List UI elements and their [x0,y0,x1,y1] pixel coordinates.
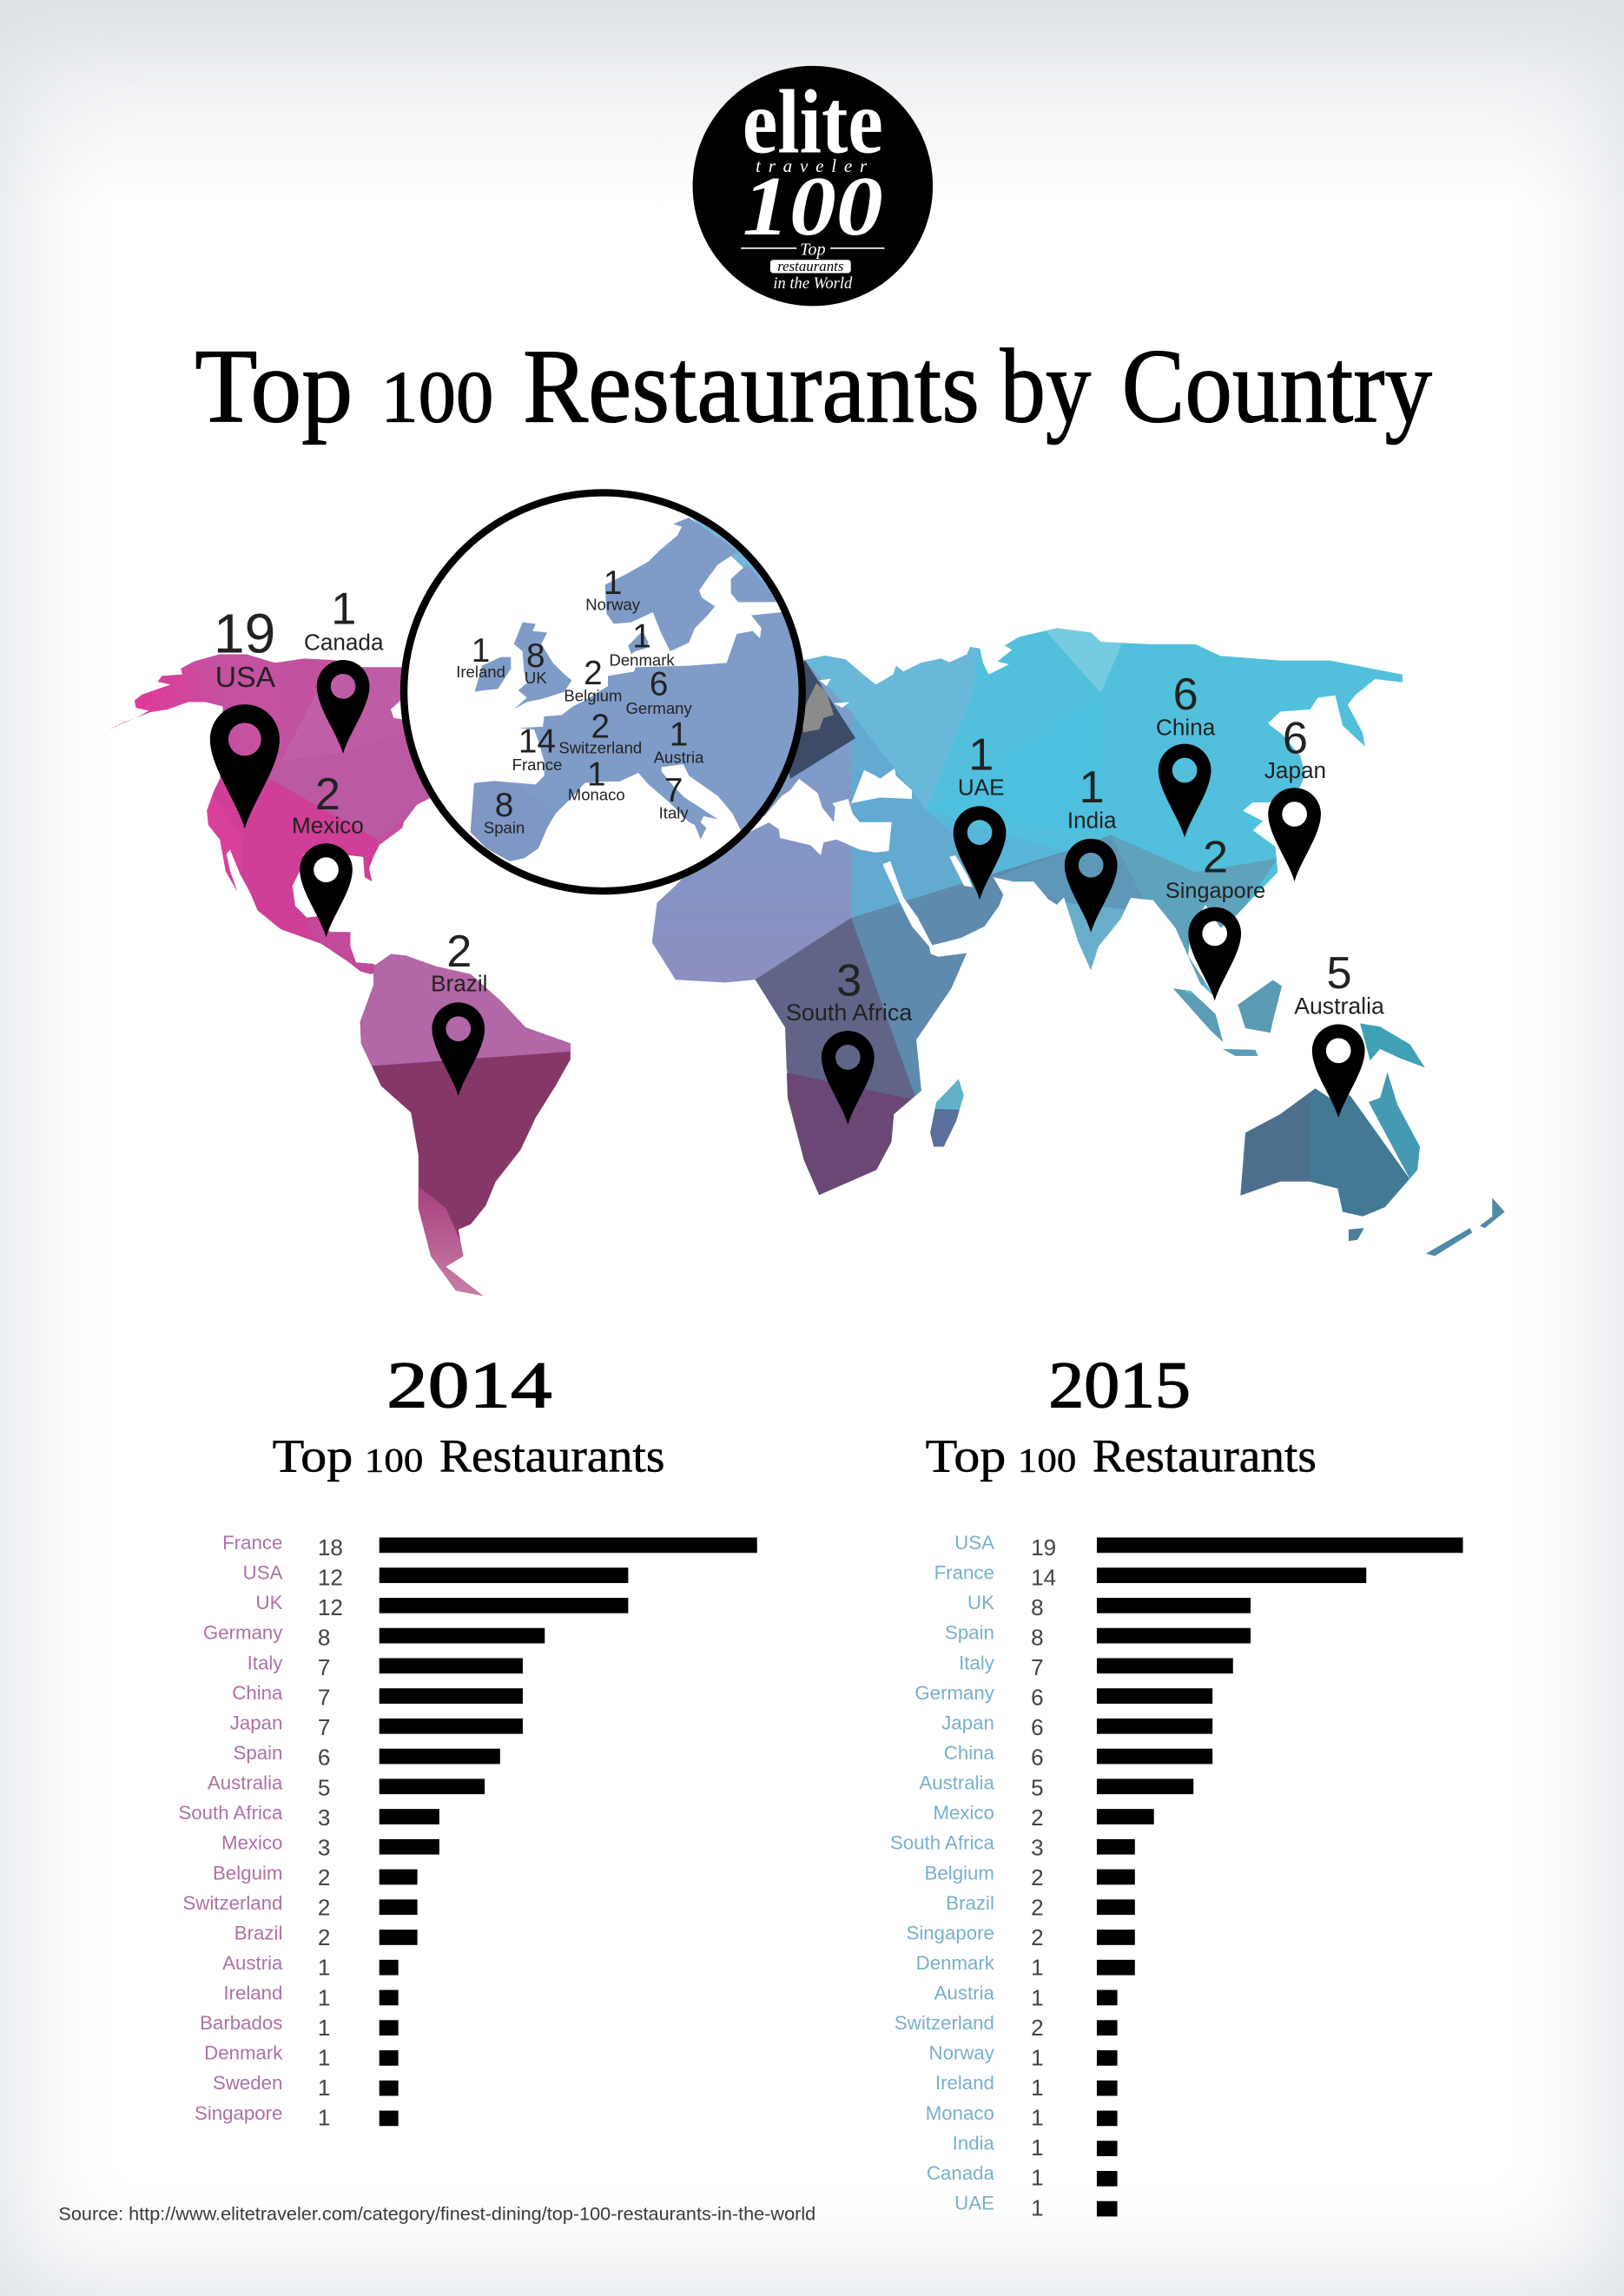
bar chart: 2014: 1 [318,2044,330,2070]
marker: Singapore: 2 [1203,832,1228,882]
marker: USA: 19 [214,602,275,664]
bar chart: 2014: China [232,1682,283,1704]
bar chart: 2014: 12 [318,1564,343,1590]
bar chart: 2014: 5 [318,1774,330,1800]
bar chart: 2014: 18 [318,1534,343,1560]
bar chart: 2014: France [222,1532,282,1554]
bar chart: 2015: Norway [929,2042,995,2064]
bar chart: 2015 [890,1532,1463,2220]
bar chart: 2015: 2 [1031,1895,1044,1921]
Europe labels: Switzerland [558,739,642,757]
marker: Mexico [292,769,364,937]
bar chart: 2014: 3 [318,1834,330,1860]
bar chart: 2014: Belguim [213,1862,282,1884]
Europe labels: Monaco [568,786,625,804]
marker: India [1065,762,1118,933]
Europe labels: Denmark [609,651,675,670]
bar chart: 2015: 1 [1031,2165,1044,2191]
Europe labels: 8 [526,637,545,675]
marker: Japan: 6 [1283,714,1308,764]
bar chart: 2015: 1 [1031,2075,1044,2101]
logo: elite traveler 100: elite [743,71,883,172]
Europe labels: 1 [670,716,688,753]
bar chart: 2015: South Africa [890,1832,995,1854]
marker: South Africa [786,955,912,1125]
Europe labels: 7 [664,772,683,809]
Europe labels: Austria [654,749,704,767]
bar chart: 2015: Germany [914,1682,995,1704]
bar chart: 2015: 1 [1031,2105,1044,2131]
bar chart: 2014: 7 [318,1654,330,1680]
Europe labels: Germany [626,699,692,717]
bar chart: 2014: Spain [234,1742,282,1764]
map: Eurasia and Africa [632,603,1505,1256]
bar chart: 2014: 6 [318,1745,330,1771]
heading: 2014: 2014 [386,1349,552,1422]
Europe labels: 14 [518,723,556,761]
bar chart: 2015: Switzerland [895,2012,994,2034]
bar chart: 2014: Ireland [223,1983,282,2004]
heading: 2014 [273,1349,665,1482]
bar chart: 2015: 1 [1031,2044,1044,2070]
bar chart: 2015: 1 [1031,2194,1044,2220]
marker: China: China [1156,714,1216,740]
title: Restaurants [523,329,980,445]
title: Top [195,329,353,445]
bar chart: 2015: Denmark [916,1952,995,1974]
bar chart: 2014: 3 [318,1804,330,1831]
marker: Canada: 1 [331,584,356,634]
zoom circle: Europe [404,492,810,891]
bar chart: 2014: 1 [318,1984,330,2010]
marker: India: 1 [1079,762,1105,813]
marker: Australia: Australia [1294,993,1384,1019]
bar chart: 2015: 2 [1031,1804,1044,1831]
top-right light area [691,518,769,590]
title: Country [1122,329,1432,445]
marker: South Africa: South Africa [786,1000,912,1026]
bar chart: 2015: Monaco [926,2102,994,2124]
bar chart: 2015: 6 [1031,1685,1044,1711]
logo: elite traveler 100: in the World [773,274,853,293]
bar chart: 2014: Germany [203,1622,283,1644]
bar chart: 2014: Mexico [221,1832,282,1854]
bar chart: 2015: 1 [1031,2134,1044,2161]
bar chart: 2015: Spain [945,1622,994,1644]
bar chart: 2015: USA [954,1532,994,1554]
Europe labels [456,564,704,836]
bar chart: 2014: 7 [318,1685,330,1711]
heading: 2015: 2015 [1048,1349,1191,1422]
marker: Singapore: Singapore [1165,879,1265,903]
heading: 2014: Restaurants [439,1430,665,1482]
bar chart: 2015: 7 [1031,1654,1044,1680]
Europe labels: 1 [472,632,490,670]
bar chart: 2015: 6 [1031,1745,1044,1771]
Europe labels: 1 [632,617,651,655]
bar chart: 2014: 2 [318,1864,330,1890]
bar chart: 2014: 1 [318,2075,330,2101]
bar chart: 2015: Italy [959,1652,995,1673]
bar chart: 2015: India [953,2132,995,2154]
bar chart: 2014: 8 [318,1624,330,1650]
bar chart: 2014: 1 [318,1955,330,1981]
marker: USA [210,602,280,828]
heading: 2015 [926,1349,1317,1482]
Europe labels: 2 [584,655,603,692]
marker: South Africa: 3 [836,955,862,1006]
logo: elite traveler 100: restaurants [777,258,844,274]
title: by [1000,329,1091,445]
heading: 2015: Restaurants [1093,1430,1317,1482]
marker: USA: USA [215,661,276,694]
bar chart: 2014: UK [256,1592,283,1613]
source note: Source: http://www.elitetraveler.com/category/finest-dining/top-100-restaurants-in-the-world [58,2204,815,2224]
heading: 2014: 100 [365,1442,423,1480]
bar chart: 2015: 2 [1031,2015,1044,2041]
bar chart: 2014: Brazil [234,1922,282,1943]
heading: 2014: Top [273,1430,353,1482]
Europe labels: 6 [650,665,668,703]
logo: elite traveler 100: traveler [756,155,868,176]
Europe labels: 1 [604,564,622,602]
bar chart: 2015: 5 [1031,1774,1044,1800]
world map [96,603,1505,1310]
marker: Canada: Canada [304,629,384,655]
Europe labels: Belgium [564,687,622,705]
bar chart: 2014: 12 [318,1594,343,1620]
bar chart: 2014: 7 [318,1714,330,1740]
marker: Canada [304,584,384,754]
marker: UAE: 1 [968,729,994,780]
bar chart: 2015: France [934,1562,994,1584]
marker: Japan [1264,714,1326,881]
marker: Mexico: 2 [315,769,340,820]
bar chart: 2014: Japan [230,1712,282,1733]
bar chart: 2014: Sweden [213,2072,282,2094]
Europe labels: 1 [587,755,606,793]
logo: elite traveler 100 [693,66,933,306]
bar chart: 2014: South Africa [178,1802,283,1824]
marker: China: 6 [1173,670,1198,720]
bar chart: 2015: 14 [1031,1564,1056,1590]
bar chart: 2014: Denmark [204,2042,283,2064]
logo: elite traveler 100: Top [800,240,826,259]
map: South America [360,953,571,1296]
title: 100 [380,358,493,439]
bar chart: 2015: 1 [1031,1955,1044,1981]
marker: China [1156,670,1216,838]
marker: Brazil: Brazil [431,971,487,997]
bar chart: 2015: 1 [1031,1984,1044,2010]
bar chart: 2014: Italy [248,1652,283,1673]
marker: Singapore [1165,832,1265,1001]
marker: UAE [954,729,1006,900]
Europe labels: 8 [495,787,513,824]
Europe labels: 2 [591,708,610,745]
bar chart: 2015: Australia [919,1772,995,1794]
bar chart: 2015: 8 [1031,1594,1044,1620]
bar chart: 2015: China [944,1742,995,1764]
bar chart: 2015: Singapore [906,1922,994,1943]
bar chart: 2014: 1 [318,2015,330,2041]
bar chart: 2014: Barbados [200,2012,282,2034]
bar chart: 2014: 2 [318,1924,330,1950]
marker: Australia [1294,948,1384,1118]
bar chart: 2014: Austria [222,1952,283,1974]
zoom shadow cone [782,660,855,779]
bar chart: 2015: UAE [954,2193,994,2214]
bar chart: 2014: USA [243,1562,283,1584]
bar chart: 2015: 8 [1031,1624,1044,1650]
bar chart: 2015: 6 [1031,1714,1044,1740]
bar chart: 2015: Japan [941,1712,994,1733]
bar chart: 2015: Austria [934,1983,995,2004]
heading: 2015: Top [926,1430,1006,1482]
bar chart: 2014 [178,1532,757,2131]
bar chart: 2015: UK [967,1592,994,1613]
bar chart: 2015: Mexico [933,1802,994,1824]
bar chart: 2015: 2 [1031,1924,1044,1950]
marker: Japan: Japan [1264,757,1326,783]
bar chart: 2015: 3 [1031,1834,1044,1860]
bar chart: 2015: 2 [1031,1864,1044,1890]
logo: elite traveler 100: 100 [743,160,883,254]
bar chart: 2014: Australia [208,1772,283,1794]
bar chart: 2014: Switzerland [182,1892,282,1914]
bar chart: 2015: Brazil [946,1892,994,1914]
marker: Mexico: Mexico [292,812,364,838]
bar chart: 2014: 2 [318,1895,330,1921]
title [195,329,1432,445]
marker: India: India [1067,808,1117,834]
Europe labels: Spain [484,818,525,836]
marker: UAE: UAE [958,775,1005,801]
map: Australia and Pacific [1231,1023,1505,1256]
Europe labels: Ireland [456,663,505,681]
map: North America [111,654,430,974]
Hudson Bay [391,699,411,721]
bar chart: 2015: Canada [927,2162,995,2184]
marker: Brazil: 2 [446,927,472,977]
marker: Brazil [431,927,487,1096]
Europe labels: Norway [585,595,641,613]
bar chart: 2014: 1 [318,2105,330,2131]
bar chart: 2015: Ireland [935,2072,994,2094]
Europe labels: UK [525,669,547,687]
Europe labels: France [512,755,562,774]
bar chart: 2015: 19 [1031,1534,1056,1560]
Europe labels: Italy [659,804,689,822]
bar chart: 2014: Singapore [195,2102,282,2124]
heading: 2015: 100 [1018,1442,1076,1480]
marker: Australia: 5 [1326,948,1352,999]
bar chart: 2015: Belgium [925,1862,994,1884]
map: inland seas [747,769,973,957]
